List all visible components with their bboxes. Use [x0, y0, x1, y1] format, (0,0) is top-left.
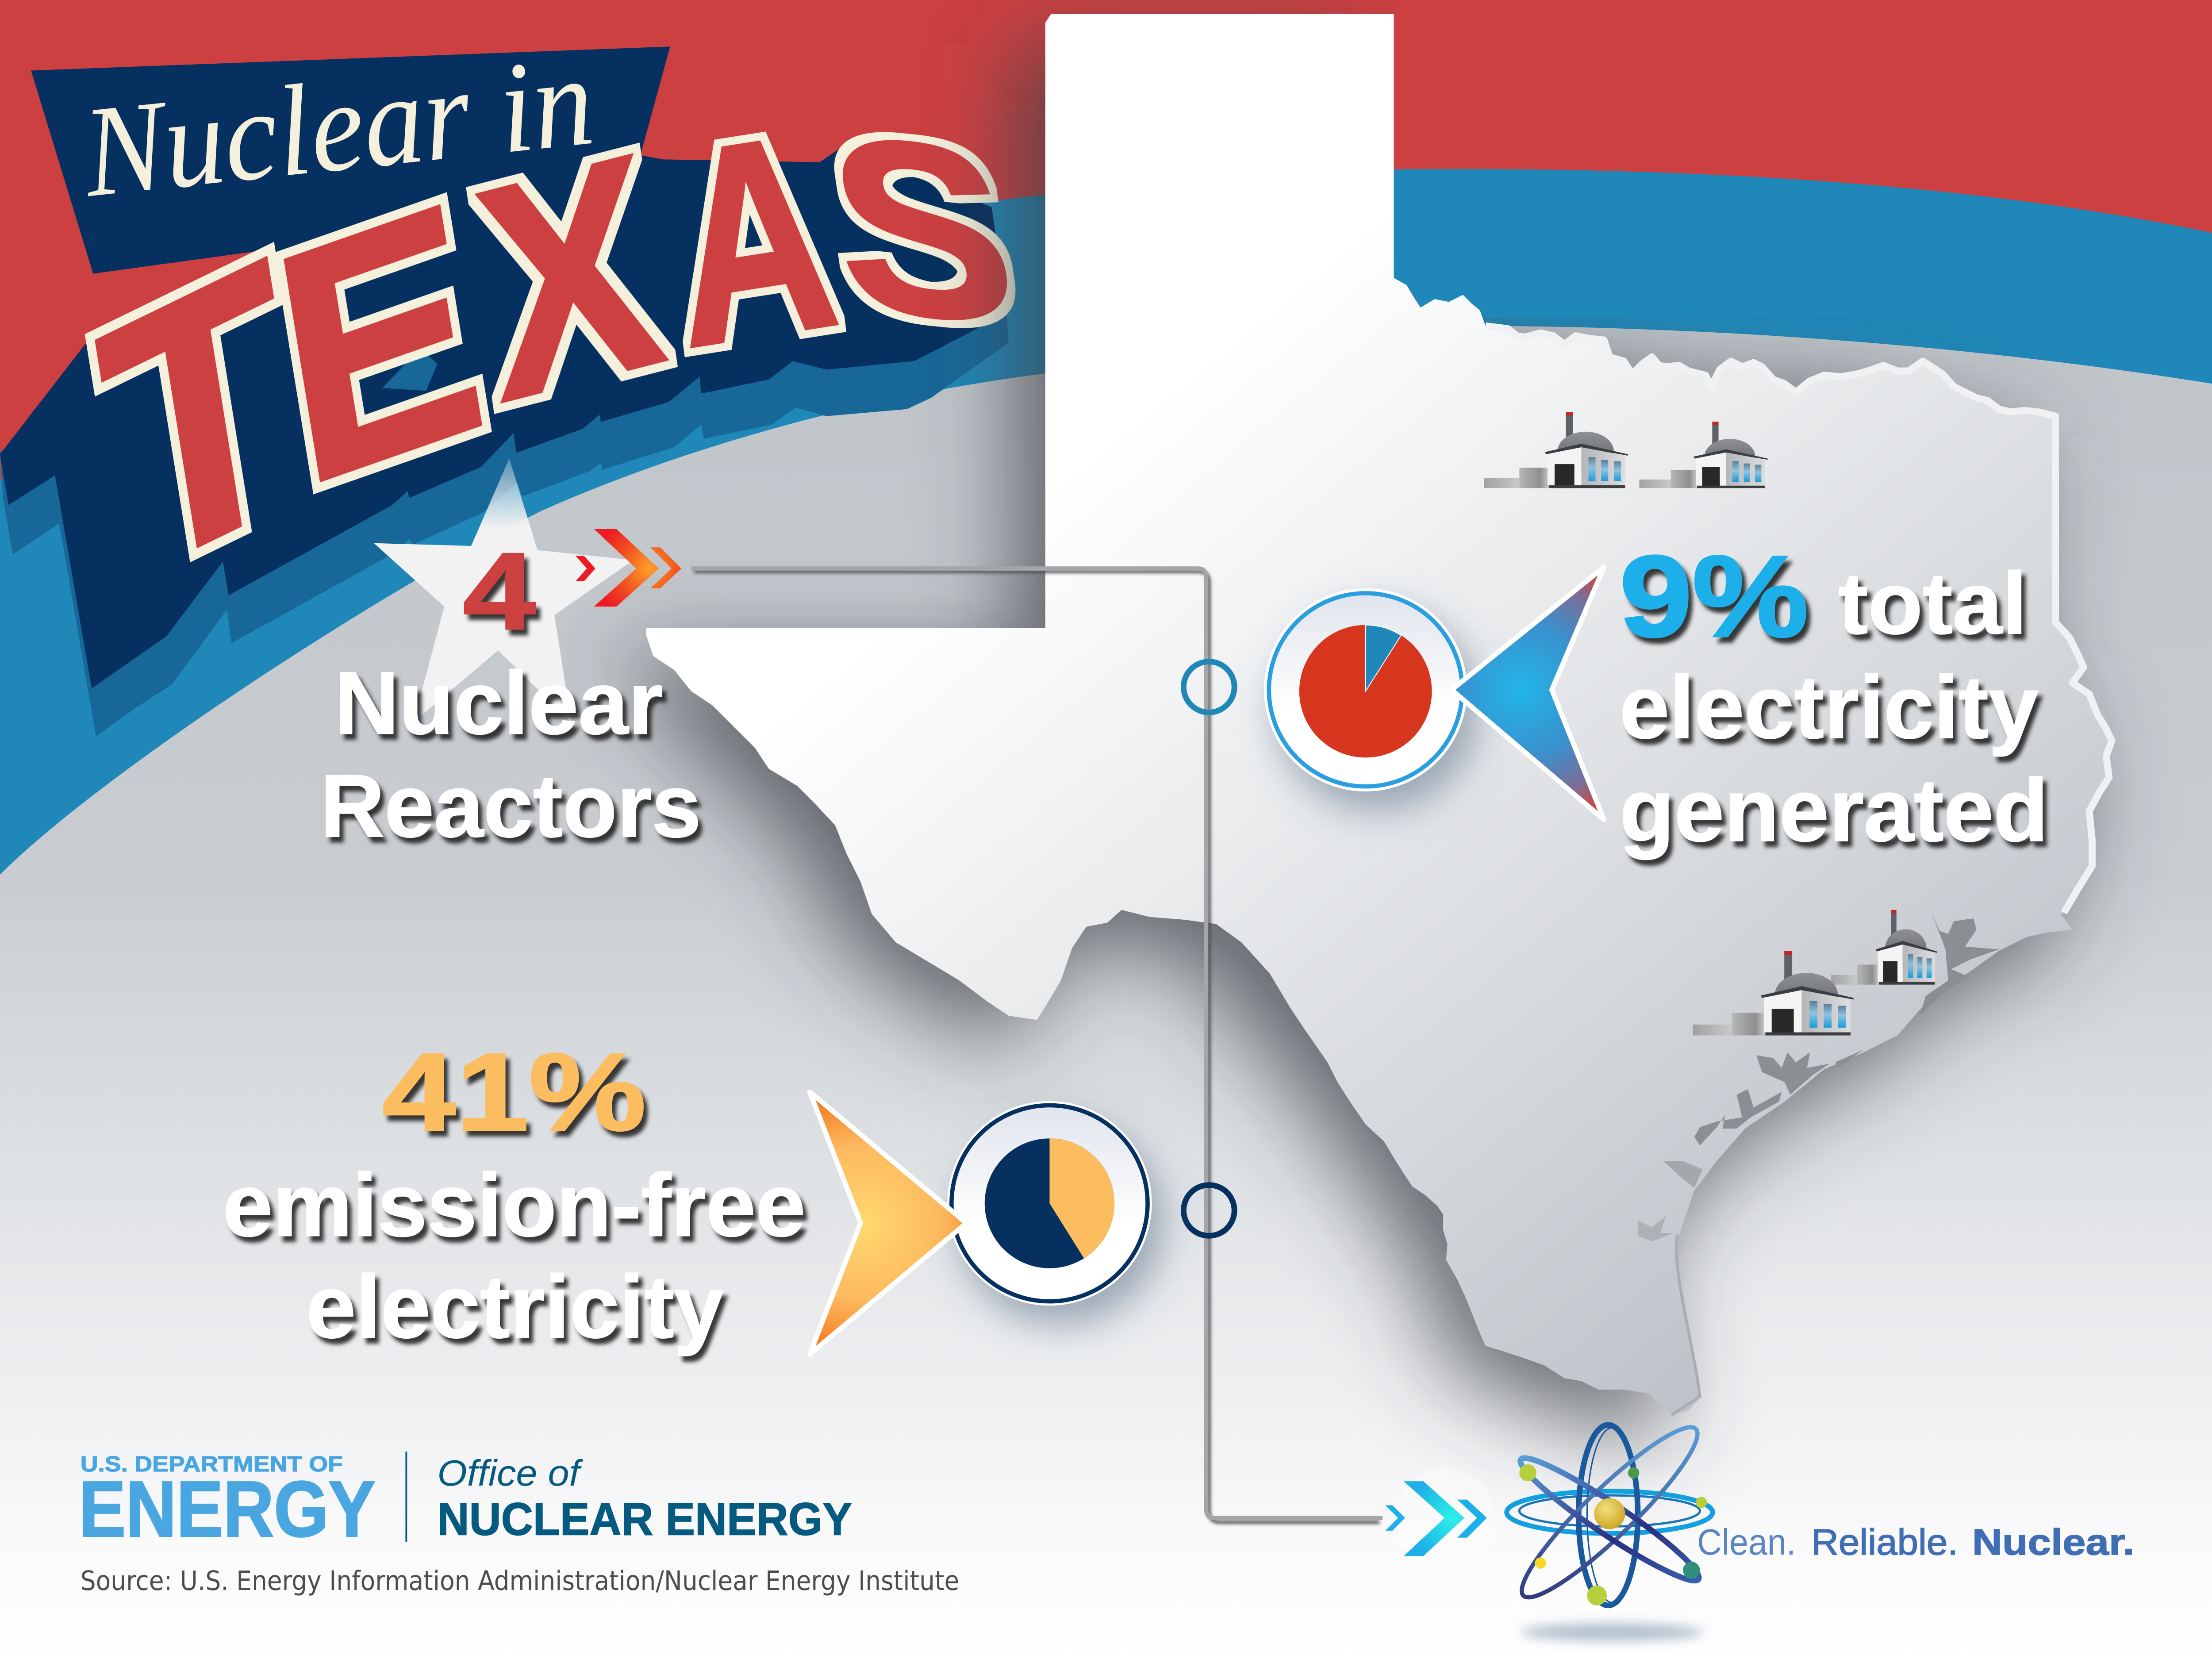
source note: Source: U.S. Energy Information Administration/Nuclear Energy Institute	[81, 1566, 959, 1597]
reactor icon: south 1	[1831, 910, 1937, 985]
tagline: Clean.	[1697, 1521, 1796, 1563]
logo: Office of Nuclear Energy: Office of	[438, 1452, 584, 1494]
label: 41% emission-free electricity: 41%	[382, 1030, 646, 1153]
blue arrow	[1452, 567, 1604, 820]
gulf coast bays	[1638, 913, 1999, 1241]
reactor icon: north 2	[1639, 422, 1768, 488]
logo: U.S. Department of Energy: U.S. DEPARTMENT OF	[81, 1452, 343, 1476]
logo: Office of Nuclear Energy	[438, 1452, 852, 1544]
title: TEXAS	[82, 73, 1030, 650]
tagline: Nuclear.	[1972, 1521, 2135, 1563]
title: TEXAS: A	[656, 73, 850, 405]
label: 41% emission-free electricity: electricity	[306, 1257, 724, 1356]
blue chevrons	[1385, 1467, 1494, 1569]
label: 9% total electricity generated: total	[1838, 554, 2027, 652]
label: 9% total electricity generated	[1620, 532, 2048, 860]
teal gap between E and X	[382, 349, 438, 391]
reactor icon: north 1	[1484, 412, 1628, 488]
tagline: Reliable.	[1811, 1521, 1958, 1563]
red chevrons	[576, 529, 681, 607]
logo: U.S. Department of Energy: ENERGY	[79, 1465, 375, 1553]
title: TEXAS: X	[461, 89, 679, 465]
pie panel: 9 percent	[1264, 588, 1467, 791]
label: Nuclear Reactors: Reactors	[320, 756, 701, 856]
orange arrow	[810, 1092, 966, 1354]
connector line	[691, 568, 1382, 1522]
map edge highlight	[1486, 326, 2112, 913]
label: Nuclear Reactors: Nuclear	[334, 653, 663, 753]
barrier island	[1672, 1234, 1700, 1415]
logo divider	[406, 1452, 407, 1542]
Texas map	[646, 14, 2115, 1415]
title extrusion: mid blue layer	[0, 211, 1009, 737]
title script: Nuclear in: Nuclear in	[75, 28, 600, 224]
star	[374, 458, 634, 722]
navy banner	[31, 46, 670, 274]
label: 9% total electricity generated: electricity	[1620, 657, 2039, 757]
reactor icon: south 2	[1693, 951, 1854, 1036]
number 4: 4	[463, 530, 536, 653]
tagline	[1697, 1521, 2135, 1563]
connector ring: navy	[1183, 1185, 1234, 1236]
logo: Office of Nuclear Energy: NUCLEAR ENERGY	[438, 1493, 852, 1544]
title: TEXAS: E	[256, 132, 502, 553]
pie panel: 41 percent	[947, 1101, 1152, 1306]
label: Nuclear Reactors	[320, 653, 701, 856]
connector ring: blue	[1183, 662, 1234, 712]
atom logo	[1507, 1412, 1713, 1641]
title: TEXAS: S	[814, 83, 1030, 376]
label: 41% emission-free electricity	[223, 1030, 806, 1356]
title extrusion: navy layer	[0, 144, 1004, 688]
Texas map shadow	[615, 45, 2084, 1443]
label: 41% emission-free electricity: emission-free	[223, 1155, 806, 1255]
title: TEXAS: T	[82, 184, 318, 650]
label: 9% total electricity generated: generated	[1620, 760, 2048, 860]
label: 9% total electricity generated: 9%	[1620, 532, 1809, 661]
blue band	[0, 169, 2212, 987]
